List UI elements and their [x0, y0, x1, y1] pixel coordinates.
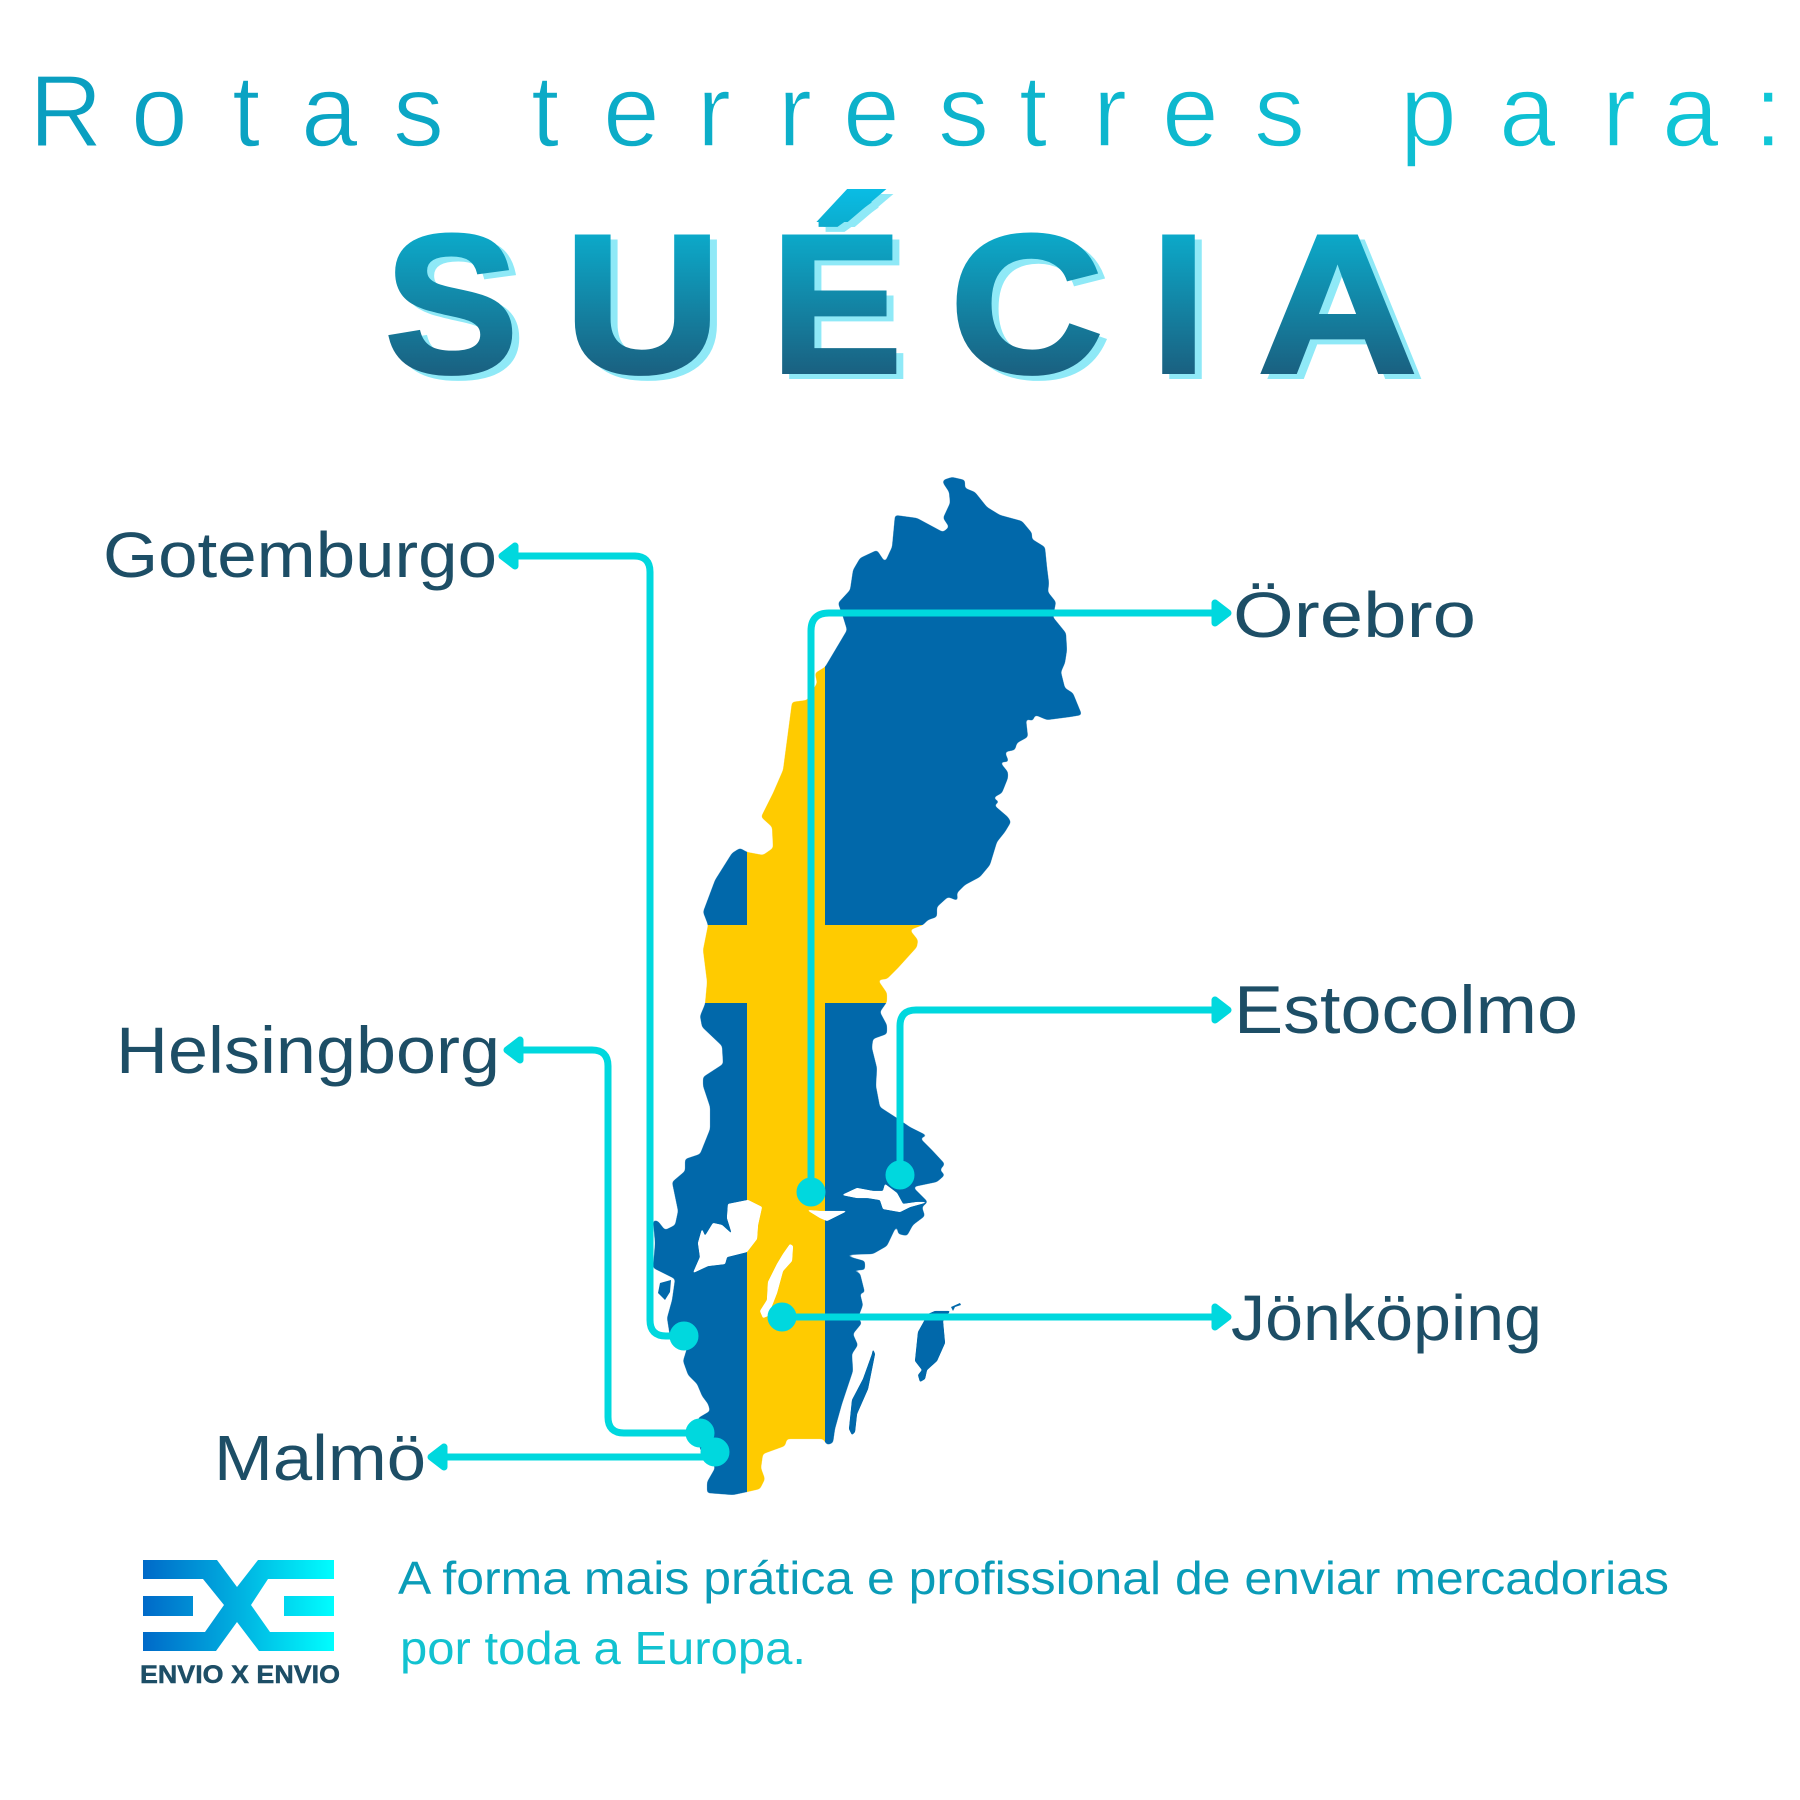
heading: SUÉCIA: I: [1151, 194, 1206, 414]
island Öland: [849, 1349, 875, 1435]
connector: Malmö: [431, 1441, 726, 1467]
heading: SUÉCIA: A: [1265, 199, 1424, 419]
label: Estocolmo: Estocolmo: [1234, 972, 1578, 1048]
heading: SUÉCIA: É: [778, 199, 909, 419]
connector: Gotemburgo: [502, 546, 695, 1347]
label: Malmö: Malmö: [214, 1422, 426, 1494]
connector: Örebro: [800, 603, 1228, 1203]
west coast islets: [658, 1280, 671, 1300]
logo wordmark: ENVIO X ENVIO: [140, 1661, 340, 1689]
tagline line 1: A forma mais prática e profissional de enviar mercadorias: [398, 1552, 1669, 1604]
heading: SUÉCIA: A: [1258, 194, 1417, 414]
lake Vättern: [760, 1244, 793, 1318]
logo mark: [143, 1560, 334, 1651]
map of Sweden with flag: [640, 470, 1090, 1500]
heading: SUÉCIA: U: [564, 194, 721, 414]
heading: SUÉCIA: C: [957, 199, 1110, 419]
label: Örebro: Örebro: [1233, 579, 1476, 651]
lake Vänern: [693, 1200, 762, 1273]
connector: Helsingborg: [507, 1040, 711, 1444]
island Fårö: [951, 1303, 961, 1311]
heading: SUÉCIA: É: [771, 194, 902, 414]
heading: SUÉCIA: C: [950, 194, 1103, 414]
island Gotland: [915, 1311, 950, 1382]
heading: SUÉCIA: S: [385, 194, 518, 414]
lake Hjälmaren: [807, 1210, 847, 1221]
label: Jönköping: Jönköping: [1231, 1282, 1542, 1354]
connector: Jönköping: [771, 1306, 1228, 1328]
title: Rotas terrestres para: Rotas terrestres para:: [29, 54, 1782, 168]
logo: Envio x Envio: [140, 1560, 340, 1689]
heading: SUÉCIA: U: [571, 199, 728, 419]
heading: SUÉCIA: I: [1158, 199, 1213, 419]
label: Helsingborg: Helsingborg: [116, 1013, 500, 1087]
label: Gotemburgo: Gotemburgo: [103, 519, 497, 591]
flag fill on mainland: [640, 470, 1090, 1500]
lake Mälaren: [842, 1184, 928, 1212]
heading: SUÉCIA: S: [392, 199, 525, 419]
heading: SUÉCIA: [385, 191, 1424, 419]
tagline line 2: por toda a Europa.: [400, 1622, 806, 1674]
connector: Estocolmo: [889, 1000, 1228, 1186]
